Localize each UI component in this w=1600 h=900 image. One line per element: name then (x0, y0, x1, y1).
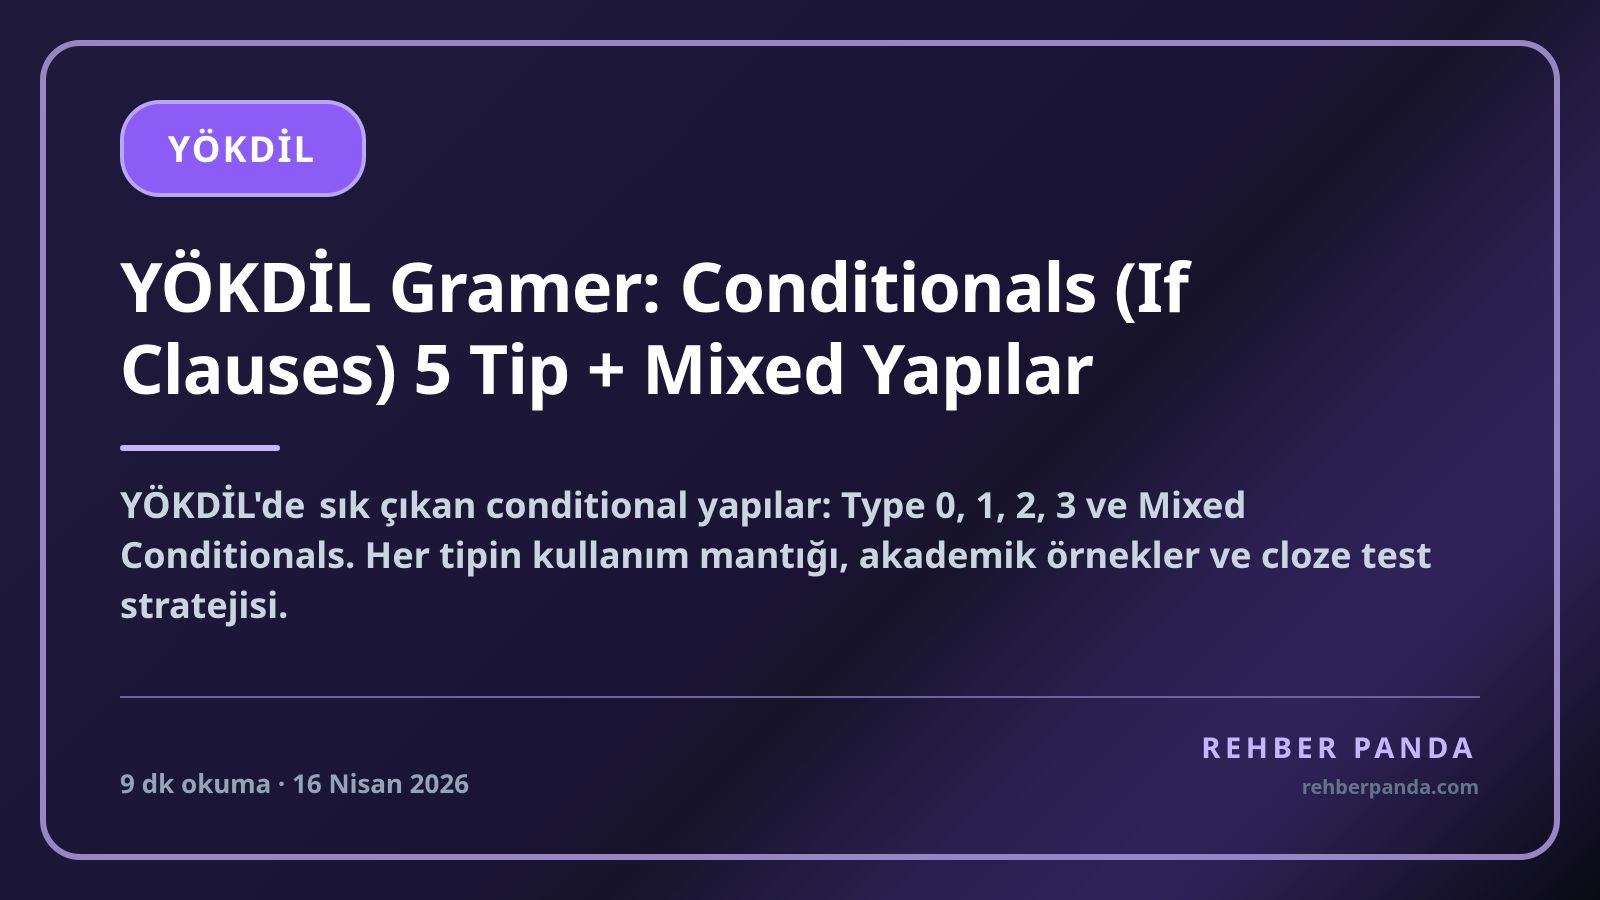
description: YÖKDİL'de sık çıkan conditional yapılar: Type 0, 1, 2, 3 ve Mixed (120, 480, 1246, 529)
brand name: REHBER PANDA (1201, 728, 1477, 767)
description: Conditionals. Her tipin kullanım mantığı, akademik örnekler ve cloze test (120, 530, 1432, 579)
badge (120, 100, 366, 197)
website: rehberpanda.com (1302, 773, 1479, 800)
accent rule (120, 445, 280, 451)
title (120, 239, 1192, 414)
title: Clauses) 5 Tip + Mixed Yapılar (120, 321, 1093, 414)
title: YÖKDİL Gramer: Conditionals (If (120, 239, 1188, 332)
reading time and date: 9 dk okuma · 16 Nisan 2026 (120, 765, 469, 801)
divider (120, 696, 1480, 698)
badge: YÖKDİL (168, 124, 316, 173)
description (120, 480, 1432, 629)
description: stratejisi. (120, 580, 288, 629)
